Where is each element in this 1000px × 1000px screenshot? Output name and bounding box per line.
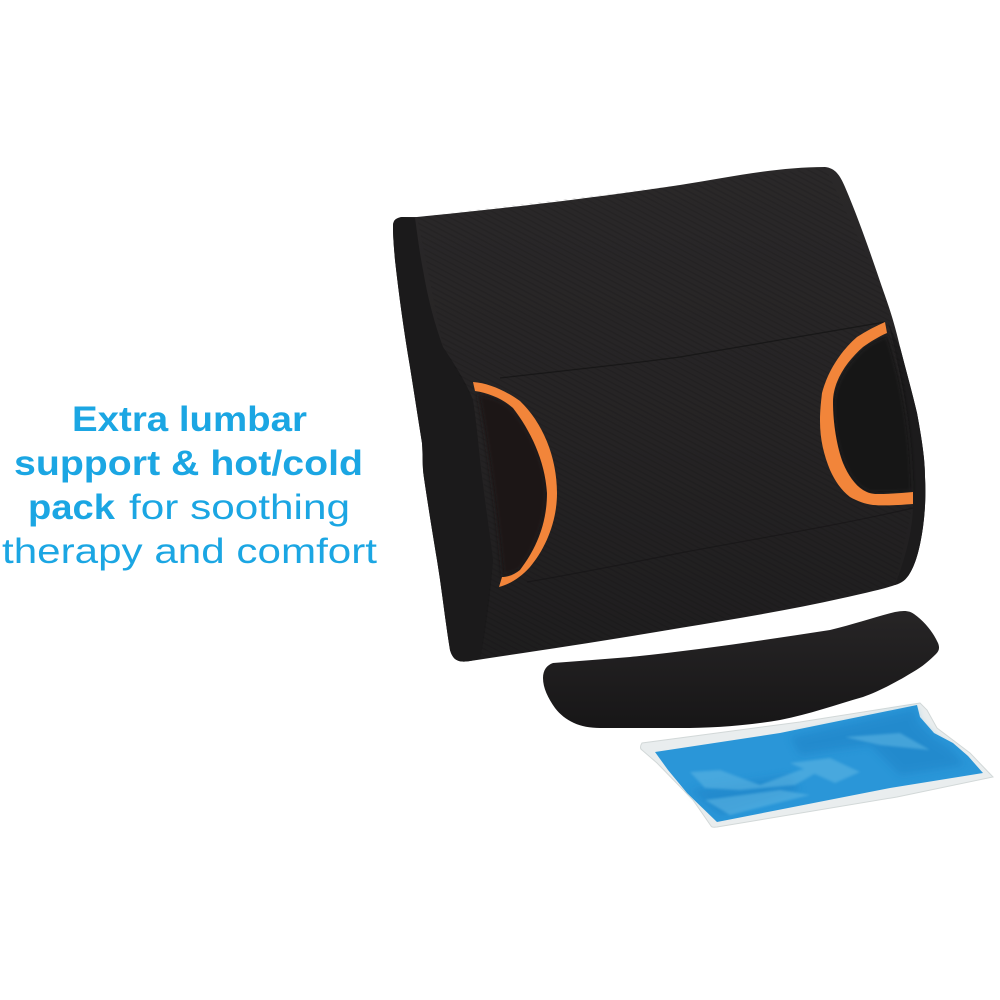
pocket seam top (500, 322, 885, 378)
pack blue gel (655, 705, 983, 822)
text block: headline: support & hot/cold (14, 443, 363, 483)
gel hot/cold pack (640, 703, 993, 827)
right handle (820, 322, 913, 505)
pack highlights (690, 733, 930, 815)
left handle (473, 382, 557, 587)
text block: headline: for soothing (129, 487, 350, 527)
pack clear border (640, 703, 993, 827)
fabric weave (417, 167, 913, 659)
text block: headline: pack (28, 487, 115, 527)
lumbar wedge insert (543, 611, 939, 728)
cushion side face (393, 217, 493, 662)
cushion right face (888, 322, 925, 585)
cushion body (393, 167, 925, 662)
text block: headline: therapy and comfort (2, 531, 377, 571)
dark area inside left handle (478, 394, 547, 577)
pack shading (690, 709, 965, 815)
lumbar cushion (393, 167, 925, 662)
text block: headline: Extra lumbar (72, 399, 307, 439)
pocket seam bottom (527, 508, 913, 582)
text block: headline (2, 399, 377, 571)
dark area inside right handle (833, 335, 912, 493)
